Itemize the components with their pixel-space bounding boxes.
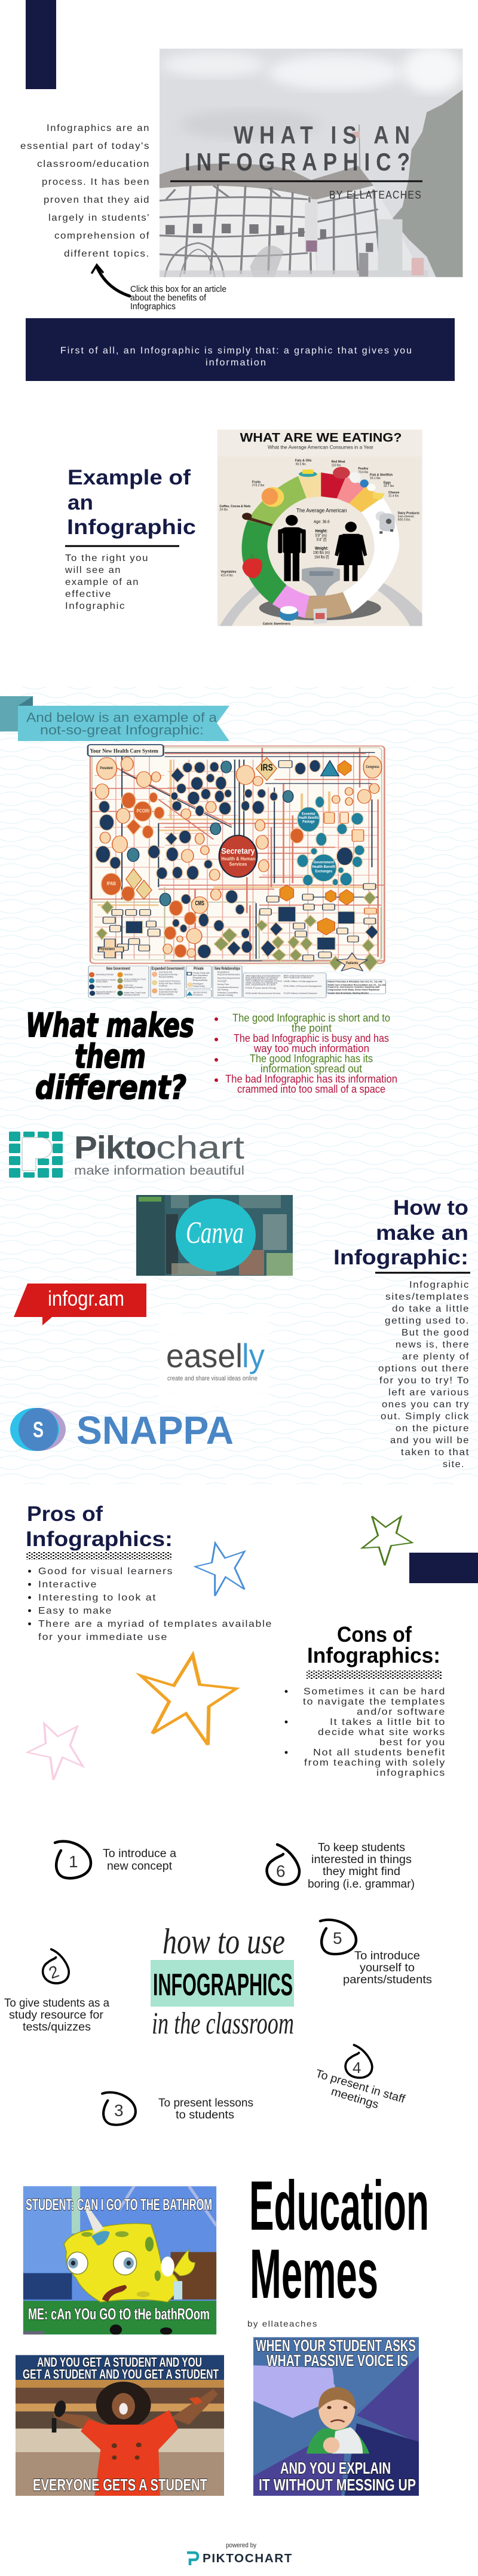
step 6: interested in things	[311, 1853, 412, 1866]
meme: success kid: WHAT PASSIVE VOICE IS	[266, 2351, 408, 2370]
good infographic: what are we eating: Coffee, Cocoa & Nuts	[219, 505, 251, 508]
pros list	[28, 1566, 272, 1642]
canva logo tile: Canva	[186, 1216, 244, 1250]
arrow to intro text	[92, 265, 130, 296]
how to paragraph: do take a little	[392, 1304, 470, 1314]
how to paragraph: out. Simply click	[381, 1412, 470, 1422]
step 4: 4	[353, 2059, 361, 2077]
how to use title: INFOGRAPHICS	[153, 1968, 293, 2002]
example heading: Infographic	[67, 516, 196, 539]
step 3: to students	[176, 2109, 234, 2121]
bad infographic: health care system: Essential	[302, 812, 315, 816]
good vs bad comparison list: The good Infographic has its	[250, 1053, 373, 1065]
meme: spongebob	[23, 2186, 216, 2335]
bad infographic: health care system: Congress	[366, 764, 379, 769]
good vs bad comparison list: The good Infographic is short and to	[232, 1012, 390, 1024]
easelly logo: easel	[166, 1337, 243, 1374]
bad infographic legend: Potential Competition	[217, 992, 238, 995]
good infographic: what are we eating: 5'9" (m)	[315, 533, 327, 538]
how to paragraph: Infographic	[409, 1280, 470, 1290]
bad infographic: health care system: Health Benefit	[312, 864, 335, 869]
good infographic: what are we eating: (non-cheese)	[398, 515, 414, 519]
bad infographic legend: Rulemaking Potential	[124, 986, 143, 989]
bad infographic: health care system: Your New Health Care System	[90, 748, 158, 754]
hero title: WHAT IS AN	[234, 121, 416, 149]
bad infographic legend: Senator Sam Brownback, Ranking Member	[327, 992, 369, 995]
intro paragraph: comprehension of	[54, 231, 150, 241]
step 5: yourself to	[360, 1962, 415, 1974]
good vs bad comparison list	[215, 1012, 397, 1095]
good infographic: what are we eating: 32.7 lbs	[384, 484, 394, 488]
good vs bad comparison list: way too much information	[253, 1042, 369, 1054]
bad infographic: health care system: PCORI	[137, 808, 149, 814]
good infographic: what are we eating: What the Average American Consumes in a Year	[268, 445, 373, 450]
hero title: INFOGRAPHIC?	[185, 148, 416, 176]
good infographic: what are we eating: Fruits	[252, 480, 261, 484]
bad infographic legend: OMB Office of Management	[283, 980, 317, 983]
how to paragraph: and you will be	[390, 1435, 470, 1446]
cons list: from teaching with solely	[304, 1758, 446, 1768]
bad infographic legend: Responsibility	[159, 976, 174, 978]
powered by footer	[187, 2542, 293, 2565]
man icon	[278, 515, 306, 581]
arrow caption: about the benefits of	[130, 293, 207, 303]
bad infographic: health care system: Patients	[346, 961, 358, 965]
step 1: 1	[69, 1852, 78, 1871]
piktochart logo: make information beautiful	[74, 1164, 244, 1178]
hero photo: Globe theatre	[160, 47, 464, 277]
bad infographic legend: Entity with New Inflows/	[159, 982, 181, 985]
bad infographic legend: Rulemaking Potential	[96, 974, 114, 976]
bad infographic legend: Government in Health	[96, 978, 116, 981]
step 3	[102, 2092, 253, 2125]
woman icon	[335, 522, 367, 581]
arrow caption	[130, 285, 226, 312]
bad infographic: health care system: CMS	[195, 900, 204, 907]
definition banner	[26, 318, 455, 381]
step 5: parents/students	[343, 1974, 432, 1986]
bad infographic: health care system: Package	[302, 819, 315, 824]
good infographic: what are we eating: Weight:	[315, 546, 328, 551]
example heading: an	[68, 491, 93, 514]
how to paragraph: options out there	[378, 1364, 470, 1374]
byline: by ellateaches	[247, 2319, 318, 2328]
good infographic: what are we eating: 110 lbs	[332, 464, 341, 467]
how to heading: How to	[393, 1196, 468, 1220]
pros heading: Infographics:	[26, 1528, 173, 1551]
meme: oprah	[16, 2355, 224, 2496]
good infographic: what are we eating: The Average American	[296, 507, 347, 514]
pros heading	[26, 1502, 173, 1560]
teal ribbon heading	[0, 696, 229, 741]
teal ribbon heading: not-so-great Infographic:	[40, 723, 204, 737]
education memes title	[249, 2166, 429, 2313]
bad infographic: health care system: Services	[229, 861, 247, 867]
step 2: To give students as a	[4, 1997, 109, 2010]
bad infographic legend: Responsibility	[159, 993, 174, 996]
bad infographic legend: Insurance Market	[96, 981, 108, 983]
canva logo tile	[136, 1195, 293, 1276]
bad infographic legend: Congressman Kevin Brady, Senior House Republican	[327, 989, 379, 992]
bad infographic: health care system	[88, 745, 385, 971]
example description	[65, 553, 149, 611]
good infographic: what are we eating: 73.6 lbs	[358, 471, 368, 474]
bad infographic legend: Private	[194, 966, 204, 971]
step 1	[55, 1842, 176, 1878]
intro paragraph: proven that they aid	[44, 195, 150, 205]
infogr.am logo: infogr.am	[48, 1287, 124, 1310]
bad infographic legend: HHS Agencies and Departments	[246, 975, 281, 977]
step 6: 6	[276, 1862, 286, 1880]
snappa logo: SNAPPA	[76, 1408, 234, 1452]
bad infographic legend: Mandate	[124, 974, 133, 976]
how to use title	[151, 1922, 294, 2041]
bad infographic legend: Function Flow	[124, 980, 137, 983]
step 2: study resource for	[9, 2009, 104, 2022]
example description: To the right you	[65, 553, 149, 563]
cons heading	[307, 1622, 442, 1679]
cons list: Sometimes it can be hard	[304, 1687, 446, 1697]
heading: what makes them different: different?	[35, 1069, 186, 1106]
meme: spongebob: ME: cAn YOu GO tO tHe bathROom	[28, 2305, 210, 2323]
bad infographic legend: Initiate New Trust Funds	[124, 992, 146, 995]
intro paragraph: Infographics are an	[47, 123, 150, 133]
snappa logo	[10, 1408, 234, 1452]
bad infographic: health care system: Health & Human	[221, 856, 256, 862]
pros list: Interactive	[38, 1580, 97, 1590]
piktochart logo: chart	[156, 1130, 244, 1166]
bad infographic legend: Trust & Minimum Trust	[124, 978, 146, 981]
good infographic: what are we eating: 415.4 lbs	[220, 574, 233, 577]
good vs bad comparison list: The bad Infographic has its information	[225, 1073, 397, 1085]
example description: example of an	[65, 577, 139, 587]
how to paragraph: site.	[443, 1459, 465, 1470]
good vs bad comparison list: information spread out	[261, 1063, 362, 1075]
intro paragraph: essential part of today's	[20, 141, 150, 151]
bad infographic legend: DOL Department of Labor	[246, 984, 276, 986]
how to paragraph	[378, 1280, 470, 1470]
good vs bad comparison list: crammed into too small of a space	[237, 1083, 385, 1095]
bad infographic legend: CDC Centers for Disease Control	[246, 980, 282, 983]
definition banner: First of all, an Infographic is simply that: a graphic that gives you	[60, 346, 413, 356]
good infographic: what are we eating: Fish & Shellfish	[370, 473, 393, 477]
pros list: Interesting to look at	[38, 1593, 157, 1603]
good infographic: what are we eating: Vegetables	[220, 571, 237, 574]
pros list: Easy to make	[38, 1606, 112, 1616]
good infographic: what are we eating: Caloric Sweeteners	[263, 623, 291, 626]
bad infographic legend: New Government	[106, 966, 130, 971]
bad infographic: health care system: IRS	[261, 762, 273, 773]
bad infographic legend: IRS Internal Revenue	[283, 975, 314, 977]
step 4	[314, 2045, 407, 2111]
good vs bad comparison list: the point	[292, 1022, 332, 1034]
bad infographic legend: Info Sharing	[217, 989, 228, 992]
bad infographic legend: NIH National Institutes	[283, 976, 312, 979]
meme: success kid: IT WITHOUT MESSING UP	[259, 2476, 416, 2494]
bad infographic: health care system: Secretary	[221, 846, 255, 855]
bad infographic legend: Special Interest	[193, 992, 207, 994]
bad infographic legend: Prepared by: Joint Economic Committee, Republican Staff	[327, 986, 379, 989]
good infographic: what are we eating	[217, 429, 422, 626]
bad infographic legend: Mandatory Benefit	[124, 993, 140, 996]
bad infographic legend: OPM Office of Personnel Management	[283, 985, 322, 988]
bad infographic legend: CMS Centers for Medicare	[246, 982, 278, 984]
bad infographic legend: ACF Administration for Children	[246, 976, 278, 979]
easelly logo: create and share visual ideas online	[167, 1375, 258, 1382]
bad infographic legend: Expanded Government	[152, 966, 184, 971]
bad infographic legend: Money Flow	[217, 983, 229, 986]
heading: what makes them different: What makes	[26, 1007, 194, 1044]
bad infographic legend: FDA Food and Drug	[246, 987, 276, 990]
intro paragraph: largely in students'	[48, 213, 150, 223]
how to paragraph: for you to try! To	[379, 1376, 470, 1386]
how to paragraph: news is, there	[396, 1340, 470, 1350]
powered by footer: powered by	[226, 2542, 256, 2549]
step 5	[320, 1920, 432, 1986]
bad infographic legend: Regulations/	[217, 971, 230, 974]
good infographic: what are we eating: 16.1 lbs	[370, 477, 381, 480]
example heading	[65, 466, 196, 547]
bad infographic legend: Trust Fund	[124, 984, 133, 987]
piktochart logo	[9, 1130, 244, 1178]
pros list: for your immediate use	[38, 1632, 168, 1642]
meme: success kid	[253, 2336, 419, 2496]
good infographic: what are we eating: Fats & Oils	[295, 459, 312, 462]
how to paragraph: ones you can try	[382, 1400, 470, 1410]
step 6: they might find	[323, 1865, 400, 1878]
bad infographic legend: New Relationships	[215, 966, 240, 971]
definition banner: information	[206, 358, 267, 368]
wavy background band	[0, 687, 478, 1484]
infogr.am logo	[14, 1284, 146, 1325]
step 2: tests/quizzes	[23, 2021, 91, 2034]
arrow caption: Click this box for an article	[130, 285, 226, 294]
bad infographic legend: Other Department	[96, 986, 112, 989]
bad infographic: health care system: Government	[313, 859, 334, 864]
heading: what makes them different: them	[75, 1038, 146, 1075]
bad infographic legend: Expanded Authority/	[159, 974, 178, 976]
pros heading: Pros of	[27, 1502, 103, 1526]
step 6: boring (i.e. grammar)	[308, 1878, 415, 1891]
pros list: Good for visual learners	[38, 1566, 173, 1577]
how to use title: in the classroom	[152, 2007, 294, 2041]
cons list: decide what site works	[318, 1727, 446, 1737]
how to paragraph: left are various	[388, 1388, 470, 1398]
bad infographic legend: Government with	[159, 971, 172, 974]
good infographic: what are we eating: WHAT ARE WE EATING?	[240, 430, 402, 444]
step 5: 5	[333, 1929, 342, 1947]
bad infographic: health care system: Health Benefits	[299, 816, 319, 820]
good infographic: what are we eating: Dairy Products	[398, 512, 419, 515]
piktochart logo: Pikto	[74, 1130, 156, 1166]
example description: Infographic	[65, 601, 125, 611]
navy corner bar	[26, 0, 56, 89]
cons list: It takes a little bit to	[330, 1717, 446, 1727]
how to heading: Infographic:	[333, 1246, 468, 1269]
intro paragraph: classroom/education	[37, 159, 150, 169]
step 2	[4, 1949, 109, 2034]
example description: will see an	[65, 565, 121, 575]
step 4: meetings	[330, 2086, 380, 2111]
good vs bad comparison list: The bad Infographic is busy and has	[234, 1032, 389, 1044]
intro paragraph	[20, 123, 150, 259]
cons list: to navigate the templates	[303, 1697, 446, 1707]
step 1: To introduce a	[103, 1848, 176, 1860]
bad infographic legend: Expanded Authority/	[159, 990, 178, 993]
intro paragraph: process. It has been	[42, 177, 150, 187]
good infographic: what are we eating: 5'4" (f)	[317, 537, 326, 542]
good infographic: what are we eating: Cheese	[388, 491, 400, 495]
good infographic: what are we eating: Poultry	[358, 467, 369, 471]
how to paragraph: taken to that	[401, 1447, 470, 1458]
cons list: Not all students benefit	[313, 1748, 446, 1758]
how to paragraph: But the good	[402, 1328, 470, 1338]
bad infographic: health care system: President	[100, 766, 113, 770]
bad infographic legend: Provisions	[193, 994, 203, 996]
bad infographic legend: Coordination/Advisory/	[217, 986, 239, 989]
good infographic: what are we eating: 60.5 lbs	[296, 463, 306, 466]
bad infographic legend: Private Entity	[192, 985, 205, 988]
how to heading: make an	[376, 1221, 468, 1245]
meme: oprah: EVERYONE GETS A STUDENT	[33, 2476, 207, 2494]
meme: spongebob: STUDENT: CAN I GO TO THE BATHROM	[26, 2196, 212, 2214]
step 6: To keep students	[318, 1842, 405, 1854]
pros list: There are a myriad of templates available	[38, 1619, 272, 1629]
step 5: To introduce	[354, 1950, 420, 1962]
bad infographic legend	[88, 966, 386, 998]
easelly logo	[159, 1314, 269, 1407]
step 4: To present in staff	[314, 2068, 407, 2106]
bad infographic legend: Health Care & Education Reconciliation Act, P.L. 111-152	[327, 984, 386, 987]
example description: effective	[65, 589, 112, 599]
how to paragraph: are plenty of	[402, 1352, 470, 1362]
good infographic: what are we eating: Red Meat	[332, 461, 345, 464]
cons list: and/or software	[357, 1707, 446, 1717]
meme: oprah: GET A STUDENT AND YOU GET A STUDENT	[23, 2367, 219, 2382]
bad infographic legend: HRSA Health Resources and Services	[246, 992, 281, 995]
bad infographic legend: PCORI Patient-Centered Research	[283, 992, 317, 995]
step 3: To present lessons	[158, 2097, 253, 2109]
cons list: best for you	[379, 1737, 446, 1748]
good infographic: what are we eating: 600.5 lbs	[398, 518, 410, 522]
good infographic: what are we eating: 190 lbs (m)	[313, 550, 330, 555]
bad infographic legend: Area Positions with	[159, 988, 177, 991]
icon: hand drawn stars	[27, 1516, 412, 1780]
bad infographic legend: Regulations/	[192, 977, 206, 980]
snappa logo: S	[33, 1417, 44, 1442]
good infographic: what are we eating: 164 lbs (f)	[314, 554, 329, 560]
easelly logo: ly	[242, 1337, 265, 1374]
bad infographic legend: Oversight	[217, 980, 227, 983]
step 6	[267, 1842, 415, 1891]
bad infographic legend: Additional Entities	[96, 993, 110, 995]
bad infographic: health care system: Physicians	[99, 946, 115, 952]
bad infographic legend: AHRQ Agency for Healthcare	[246, 978, 278, 981]
how to paragraph: on the picture	[396, 1423, 470, 1434]
good infographic: what are we eating: Age: 36.6	[314, 519, 330, 525]
bad infographic legend: New Mandates/	[192, 974, 208, 977]
good infographic: what are we eating: 31.4 lbs	[388, 495, 399, 498]
how to use title: how to use	[163, 1922, 285, 1961]
heading: what makes them different	[26, 1007, 194, 1106]
intro paragraph: different topics.	[64, 249, 150, 259]
bad infographic: health care system: IPAB	[107, 881, 116, 886]
bad infographic legend: Requirements/Mandates	[217, 974, 240, 976]
good infographic: what are we eating: 24 lbs	[219, 508, 228, 511]
cons heading: Cons of	[337, 1622, 412, 1647]
good infographic: what are we eating: Height:	[315, 529, 327, 534]
bad infographic legend: Reporting Requirements	[217, 977, 240, 980]
bad infographic legend: (includes Existing)	[217, 994, 234, 997]
how to heading	[333, 1196, 470, 1274]
bad infographic legend: Government Financed	[159, 980, 180, 983]
bad infographic: health care system: Exchanges	[315, 868, 332, 873]
cons list	[285, 1687, 446, 1778]
step 1: new concept	[107, 1860, 173, 1873]
hero title	[170, 121, 422, 201]
bad infographic legend: Outflows	[159, 984, 168, 987]
how to paragraph: getting used to.	[385, 1316, 470, 1326]
meme: success kid: AND YOU EXPLAIN	[280, 2459, 391, 2477]
good infographic: what are we eating: 273.2 lbs	[252, 484, 264, 487]
good infographic: what are we eating: Eggs	[384, 481, 391, 484]
powered by footer: PIKTOCHART	[203, 2552, 293, 2565]
bad infographic legend: Privileged	[192, 983, 203, 986]
meme: oprah: AND YOU GET A STUDENT AND YOU	[37, 2355, 202, 2370]
bad infographic legend: Patient Protection & Affordable Care Act, P.L. 111-148;	[327, 981, 383, 983]
bad infographic legend: Private Entity with	[192, 972, 210, 975]
arrow caption: Infographics	[130, 302, 176, 312]
hero title: BY ELLATEACHES	[329, 189, 422, 201]
teal ribbon heading: And below is an example of a	[26, 710, 217, 725]
cons heading: Infographics:	[307, 1643, 440, 1667]
example heading: Example of	[68, 466, 191, 489]
step 2: 2	[46, 1962, 62, 1982]
step 3: 3	[114, 2101, 124, 2120]
navy side bar	[409, 1553, 478, 1583]
bad infographic legend: Responsibility	[192, 979, 207, 982]
bad infographic legend: Represents Number of	[96, 990, 115, 993]
how to paragraph: sites/templates	[385, 1292, 470, 1302]
cons list: infographics	[376, 1768, 446, 1778]
